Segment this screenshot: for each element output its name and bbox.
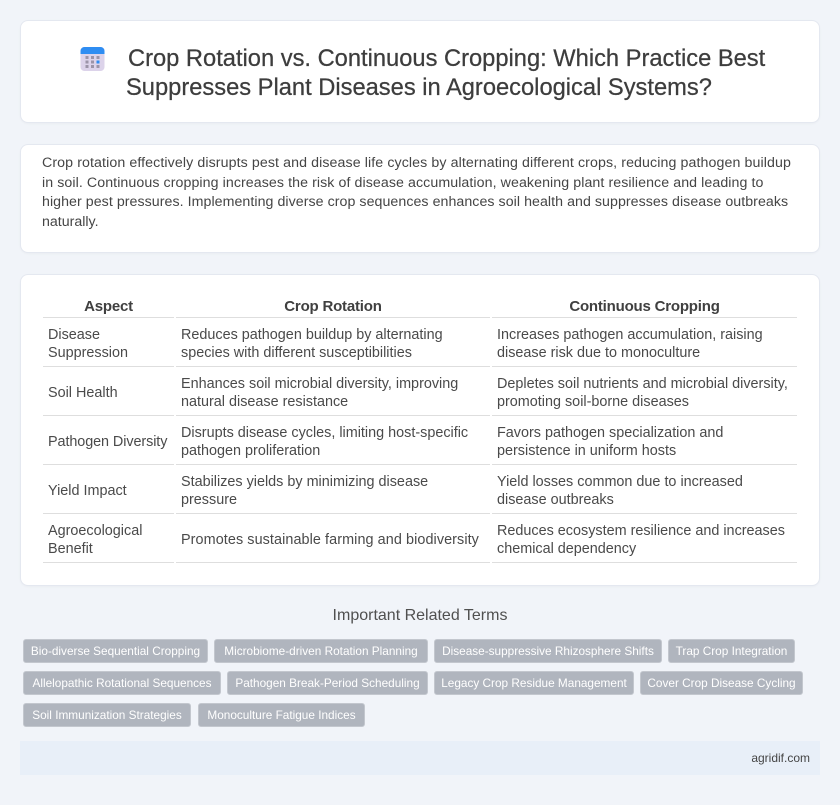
intro text: naturally. [42, 214, 99, 230]
row: disease suppression [48, 327, 763, 361]
row: soil health: natural disease resistance [181, 394, 348, 410]
row: agroecological benefit: Reduces ecosystem resilience and increases [497, 523, 785, 539]
tag [668, 639, 795, 663]
table header: Continuous Cropping [569, 298, 720, 315]
tag: Cover Crop Disease Cycling [647, 676, 796, 690]
tag: Legacy Crop Residue Management [441, 676, 627, 690]
title: Suppresses Plant Diseases in Agroecological Systems? [126, 75, 712, 101]
row: agroecological benefit: Agroecological [48, 523, 142, 539]
row: agroecological benefit: chemical dependency [497, 541, 636, 557]
row: yield impact: Yield Impact [48, 483, 127, 499]
tag [640, 671, 803, 695]
row: disease suppression: Suppression [48, 345, 128, 361]
comparison table panel [20, 274, 820, 586]
tag: Microbiome-driven Rotation Planning [224, 644, 418, 658]
intro text [42, 155, 791, 230]
tag [23, 671, 221, 695]
row: pathogen diversity: pathogen proliferation [181, 443, 320, 459]
icon: calendar [80, 47, 104, 71]
tag: Monoculture Fatigue Indices [207, 708, 356, 722]
intro text: Crop rotation effectively disrupts pest and disease life cycles by alternating different crops, reducing pathogen buildup [42, 155, 791, 171]
row: yield impact: Yield losses common due to increased [497, 474, 743, 490]
related terms heading: Important Related Terms [333, 607, 507, 624]
row: disease suppression: Reduces pathogen buildup by alternating [181, 327, 443, 343]
table header: Crop Rotation [284, 298, 382, 315]
tag: Allelopathic Rotational Sequences [32, 676, 212, 690]
title card [20, 20, 820, 123]
row: yield impact: pressure [181, 492, 237, 508]
tag: Bio-diverse Sequential Cropping [31, 644, 200, 658]
row: pathogen diversity [48, 425, 723, 459]
row: pathogen diversity: Disrupts disease cycles, limiting host-specific [181, 425, 468, 441]
footer bar [20, 741, 820, 775]
row: soil health: Depletes soil nutrients and microbial diversity, [497, 376, 788, 392]
row: disease suppression: disease risk due to monoculture [497, 345, 700, 361]
footer source: agridif.com [751, 751, 810, 765]
row: soil health: promoting soil-borne diseases [497, 394, 689, 410]
row: disease suppression: Increases pathogen accumulation, raising [497, 327, 763, 343]
tag [434, 671, 634, 695]
tag [23, 703, 191, 727]
row: agroecological benefit: Promotes sustainable farming and biodiversity [181, 532, 479, 548]
row: agroecological benefit: Benefit [48, 541, 93, 557]
table header [84, 298, 720, 315]
row: yield impact: disease outbreaks [497, 492, 614, 508]
tag [214, 639, 428, 663]
row: soil health: Soil Health [48, 385, 118, 401]
row: disease suppression: species with different susceptibilities [181, 345, 412, 361]
intro text: in soil. Continuous cropping increases the risk of disease accumulation, weakening plant resilience and leading to [42, 175, 764, 191]
row: soil health [48, 376, 788, 410]
row: soil health: Enhances soil microbial diversity, improving [181, 376, 458, 392]
tag [227, 671, 428, 695]
row: pathogen diversity: persistence in uniform hosts [497, 443, 676, 459]
tag [198, 703, 365, 727]
tag: Trap Crop Integration [676, 644, 787, 658]
row: pathogen diversity: Pathogen Diversity [48, 434, 167, 450]
related terms tags [23, 639, 803, 727]
intro panel [20, 144, 820, 253]
row: agroecological benefit [48, 523, 785, 557]
row: yield impact: Stabilizes yields by minimizing disease [181, 474, 428, 490]
row: disease suppression: Disease [48, 327, 100, 343]
row: pathogen diversity: Favors pathogen specialization and [497, 425, 723, 441]
tag: Pathogen Break-Period Scheduling [235, 676, 420, 690]
title: Crop Rotation vs. Continuous Cropping: Which Practice Best [128, 46, 765, 72]
title [126, 46, 766, 101]
tag: Disease-suppressive Rhizosphere Shifts [442, 644, 654, 658]
table header: Aspect [84, 298, 133, 315]
intro text: higher pest pressures. Implementing diverse crop sequences enhances soil health and suppresses disease outbreaks [42, 194, 788, 210]
tag: Soil Immunization Strategies [32, 708, 182, 722]
row: yield impact [48, 474, 743, 508]
tag [23, 639, 208, 663]
tag [434, 639, 662, 663]
